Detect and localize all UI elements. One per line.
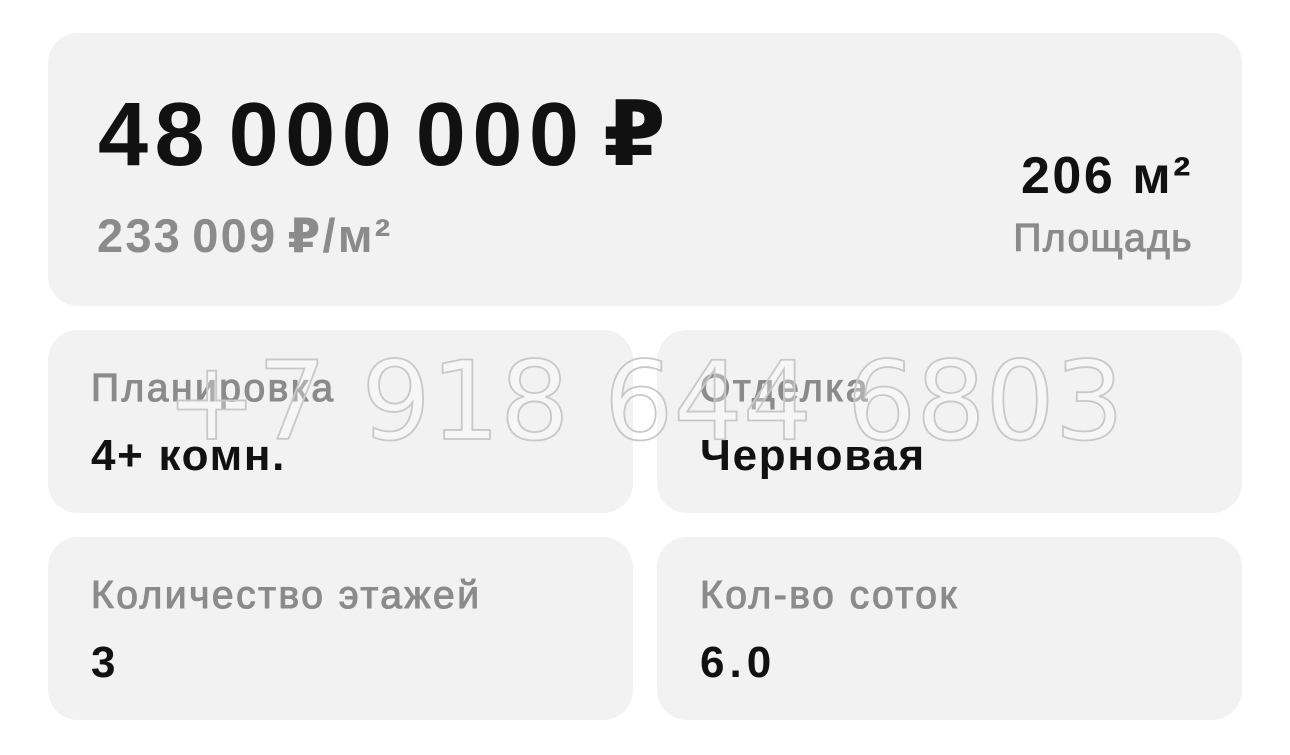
area label: Площадь [1013,217,1193,260]
price per square metre: 233 009 ₽/м² [97,209,393,262]
panel: finish [657,330,1242,513]
plot size label: Кол-во соток [700,574,959,617]
panel: layout [48,330,633,513]
plot size value: 6.0 [700,638,776,687]
finish label: Отделка [700,367,870,410]
panel: price and area [48,33,1242,306]
layout value: 4+ комн. [91,431,286,480]
price: 48 000 000 ₽ [98,85,672,185]
finish value: Черновая [700,431,926,480]
floors label: Количество этажей [91,574,482,617]
panel: floors [48,537,633,720]
area value: 206 м² [1021,147,1193,205]
floors value: 3 [91,638,117,687]
panel: plot size [657,537,1242,720]
watermark: phone number: +7 918 644 6803 [166,338,1124,465]
layout label: Планировка [91,367,336,410]
